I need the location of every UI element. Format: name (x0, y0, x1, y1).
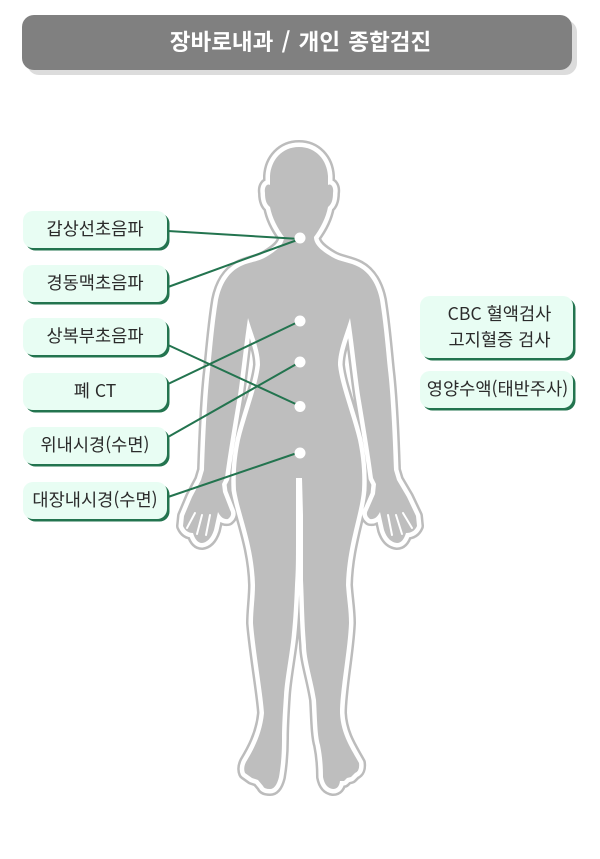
title banner (22, 15, 572, 70)
label: upper abdominal ultrasound: 상복부초음파 (46, 323, 144, 348)
label: blood tests: 고지혈증 검사 (448, 326, 551, 352)
label: gastroscopy (23, 427, 167, 464)
label: colonoscopy (23, 482, 167, 519)
label: thyroid ultrasound (23, 211, 167, 248)
label: IV nutrition: 영양수액(태반주사) (427, 376, 568, 401)
label: carotid ultrasound (23, 265, 167, 302)
human body silhouette (183, 147, 417, 789)
label: thyroid ultrasound: 갑상선초음파 (46, 216, 144, 241)
connector lines (168, 231, 300, 497)
label: upper abdominal ultrasound (23, 318, 167, 355)
label: lung CT (23, 373, 167, 410)
label: colonoscopy: 대장내시경(수면) (32, 487, 158, 512)
label: lung CT: 폐 CT (74, 378, 116, 403)
label: carotid ultrasound: 경동맥초음파 (46, 270, 144, 295)
label: IV nutrition (420, 371, 573, 408)
label: blood tests: CBC 혈액검사 (448, 300, 551, 326)
label: gastroscopy: 위내시경(수면) (40, 432, 150, 457)
marker dots (294, 232, 306, 458)
title banner: 장바로내과 / 개인 종합검진 (170, 25, 431, 57)
label: blood tests (420, 296, 573, 358)
